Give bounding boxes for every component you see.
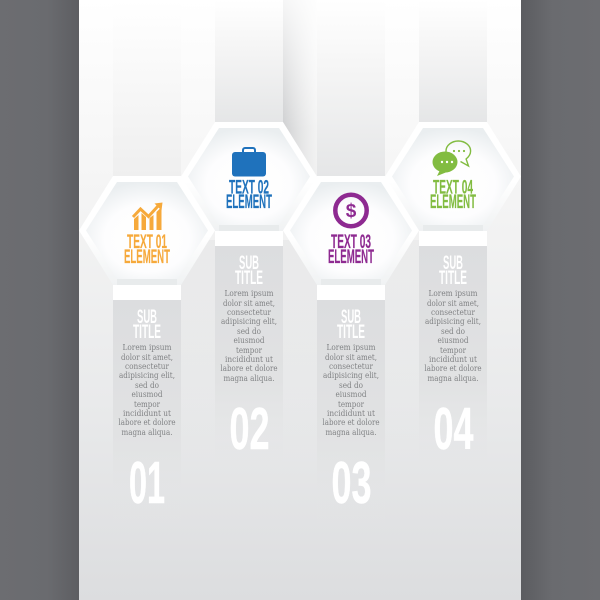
column 1 body text: labore et dolore bbox=[118, 418, 176, 428]
icon: speech bubbles bbox=[432, 141, 471, 176]
background column shading bbox=[113, 0, 487, 460]
column 3 body text: magna aliqua. bbox=[326, 428, 376, 438]
column 3 body text: labore et dolore bbox=[322, 418, 380, 428]
column 2 subtitle: SUB bbox=[239, 253, 259, 274]
column 4 body text: tempor bbox=[440, 346, 467, 356]
text 04 element label: ELEMENT bbox=[430, 192, 476, 213]
column 1 body text: sed do bbox=[135, 381, 159, 391]
column 1 bbox=[113, 285, 181, 525]
column 4 white bar bbox=[419, 231, 487, 246]
column 2 subtitle bbox=[235, 253, 263, 289]
text 03 element label: TEXT 03 bbox=[331, 232, 371, 253]
column 4 body text: dolor sit amet, bbox=[427, 299, 479, 309]
column 2 body text: Lorem ipsum bbox=[224, 289, 274, 299]
column 3 body text: adipisicing elit, bbox=[323, 371, 379, 381]
column 2 body text: labore et dolore bbox=[220, 364, 278, 374]
column 2 body text: consectetur bbox=[227, 308, 272, 318]
icon: growth chart bbox=[133, 202, 162, 230]
column 2 white bar bbox=[215, 231, 283, 246]
column 3 subtitle: SUB bbox=[341, 307, 361, 328]
column 4 body text: incididunt ut bbox=[429, 355, 477, 365]
column 2 bbox=[215, 231, 283, 471]
column 2 body text: adipisicing elit, bbox=[221, 317, 277, 327]
column 2 body text: magna aliqua. bbox=[224, 374, 274, 384]
column 1 body text: dolor sit amet, bbox=[121, 353, 173, 363]
column 3 subtitle: TITLE bbox=[337, 322, 365, 343]
column 4 body text: magna aliqua. bbox=[428, 374, 478, 384]
column 4 bbox=[419, 231, 487, 471]
column 2 body text: sed do bbox=[237, 327, 261, 337]
column 1 body text: magna aliqua. bbox=[122, 428, 172, 438]
column 1 subtitle: TITLE bbox=[133, 322, 161, 343]
text 02 element label: ELEMENT bbox=[226, 192, 272, 213]
column 1 body text: tempor bbox=[134, 400, 161, 410]
icon: briefcase bbox=[232, 148, 266, 176]
column 4 subtitle bbox=[439, 253, 467, 289]
column 2 body text bbox=[220, 289, 278, 384]
column 3 white bar bbox=[317, 285, 385, 300]
column 4 body text: sed do bbox=[441, 327, 465, 337]
dark background left bbox=[0, 0, 79, 600]
column 4 body text: adipisicing elit, bbox=[425, 317, 481, 327]
column 2 body text: tempor bbox=[236, 346, 263, 356]
column 1 white bar bbox=[113, 285, 181, 300]
text 03 element label: ELEMENT bbox=[328, 247, 374, 268]
text 01 element label: ELEMENT bbox=[124, 247, 170, 268]
text 04 element label: TEXT 04 bbox=[433, 178, 473, 198]
text 04 element label bbox=[430, 178, 476, 213]
text 01 element label bbox=[124, 232, 170, 268]
column 1 body text: adipisicing elit, bbox=[119, 371, 175, 381]
column 4 body text: Lorem ipsum bbox=[428, 289, 478, 299]
dark background right bbox=[521, 0, 600, 600]
column 2 body bbox=[215, 246, 283, 471]
column 3 body text bbox=[322, 343, 380, 438]
column 3 body bbox=[317, 300, 385, 525]
column 1 subtitle bbox=[133, 307, 161, 343]
hexagon 3 bbox=[283, 176, 419, 285]
column 2 body text: incididunt ut bbox=[225, 355, 273, 365]
column 3 bbox=[317, 285, 385, 525]
column 4 body text: eiusmod bbox=[438, 336, 469, 346]
column 3 body text: incididunt ut bbox=[327, 409, 375, 419]
column 4 subtitle: TITLE bbox=[439, 268, 467, 289]
column 3 number: 03 bbox=[332, 450, 372, 516]
column 2 body text: eiusmod bbox=[234, 336, 265, 346]
column 3 body text: consectetur bbox=[329, 362, 374, 372]
column 2 subtitle: TITLE bbox=[235, 268, 263, 289]
column 1 body text: incididunt ut bbox=[123, 409, 171, 419]
column 4 number: 04 bbox=[434, 396, 474, 462]
column 1 subtitle: SUB bbox=[137, 307, 157, 328]
column 3 body text: dolor sit amet, bbox=[325, 353, 377, 363]
column 4 body text: consectetur bbox=[431, 308, 476, 318]
text 02 element label: TEXT 02 bbox=[229, 178, 269, 198]
column 1 body text bbox=[118, 343, 176, 438]
column 2 number: 02 bbox=[230, 396, 270, 462]
column 1 number: 01 bbox=[129, 450, 165, 516]
column 4 body text bbox=[424, 289, 482, 384]
column 4 body bbox=[419, 246, 487, 471]
column 1 body text: consectetur bbox=[125, 362, 170, 372]
column 4 body text: labore et dolore bbox=[424, 364, 482, 374]
hexagon 1 bbox=[79, 176, 215, 285]
column 3 body text: sed do bbox=[339, 381, 363, 391]
column 1 body bbox=[113, 300, 181, 525]
hexagon 4 bbox=[385, 122, 521, 231]
light panel bbox=[79, 0, 521, 600]
text 02 element label bbox=[226, 178, 272, 213]
column 3 body text: tempor bbox=[338, 400, 365, 410]
column 3 subtitle bbox=[337, 307, 365, 343]
column 3 body text: eiusmod bbox=[336, 390, 367, 400]
column 4 subtitle: SUB bbox=[443, 253, 463, 274]
column 1 body text: Lorem ipsum bbox=[122, 343, 172, 353]
column 3 body text: Lorem ipsum bbox=[326, 343, 376, 353]
column 2 body text: dolor sit amet, bbox=[223, 299, 275, 309]
column 1 body text: eiusmod bbox=[132, 390, 163, 400]
icon: dollar coin: $ bbox=[346, 201, 357, 222]
text 01 element label: TEXT 01 bbox=[127, 232, 167, 253]
hexagon 2 bbox=[181, 122, 317, 231]
text 03 element label bbox=[328, 232, 374, 268]
